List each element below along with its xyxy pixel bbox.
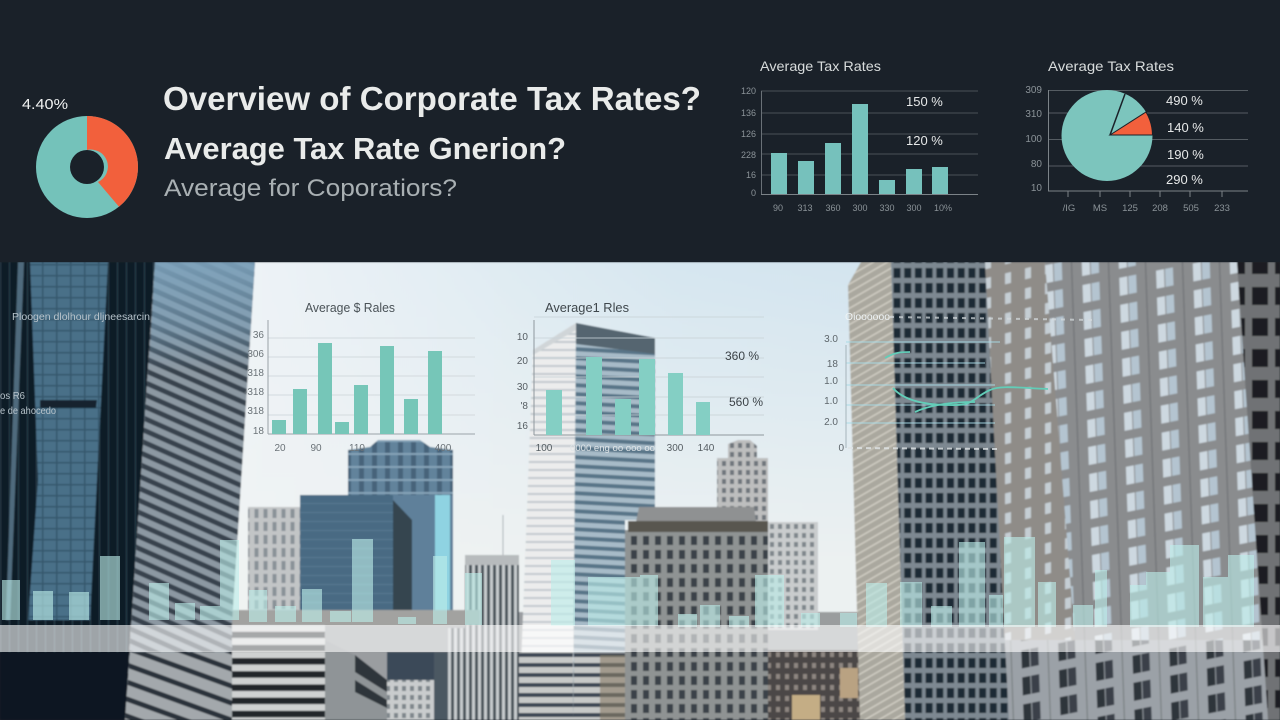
- pie chart: average tax rates: Average Tax Rates: [1048, 58, 1174, 74]
- building: center-left cluster: [230, 440, 519, 632]
- photo overlay line chart right: 1.0: [824, 376, 838, 387]
- photo overlay bar chart center: [517, 300, 764, 454]
- city skyline photo: [0, 262, 1280, 720]
- caption: Average for Coporatiors?: [164, 175, 457, 202]
- photo overlay line chart right: 3.0: [824, 334, 838, 345]
- pie chart: average tax rates: 309: [1025, 85, 1042, 96]
- photo overlay line chart right: 2.0: [824, 417, 838, 428]
- bar chart: average tax rates: 228: [741, 150, 756, 160]
- bar chart: average tax rates: 300: [906, 203, 922, 213]
- photo overlay bar chart center: 560 %: [729, 395, 763, 409]
- bar chart: average tax rates: Average Tax Rates: [760, 58, 881, 74]
- building: dark grid tower: [848, 262, 1009, 720]
- building: slanted gray tower: [125, 262, 255, 720]
- photo overlay bar chart left: [244, 300, 475, 454]
- pie chart: average tax rates: 290 %: [1166, 172, 1203, 187]
- overlay text on dark tower: e de ahocedo: [0, 406, 56, 417]
- donut chart: [22, 96, 138, 218]
- photo overlay line chart right: 18: [827, 359, 838, 370]
- photo overlay bar chart left: 36: [253, 330, 264, 341]
- pie chart: average tax rates: [1025, 58, 1248, 214]
- pie chart: average tax rates: 208: [1152, 203, 1168, 214]
- photo overlay bar chart center: 20: [517, 356, 528, 367]
- pie chart: average tax rates: 490 %: [1166, 93, 1203, 108]
- donut chart: 4.40%: [22, 96, 68, 113]
- bar chart: average tax rates: 300: [852, 203, 868, 213]
- photo overlay bar chart left: 110: [349, 443, 365, 454]
- photo overlay bar chart center: 16: [517, 421, 528, 432]
- pie chart: average tax rates: 233: [1214, 203, 1230, 214]
- bar chart: average tax rates: 360: [825, 203, 841, 213]
- bar chart: average tax rates: [741, 58, 978, 213]
- bar chart: average tax rates: 126: [741, 129, 756, 139]
- pie chart: average tax rates: 190 %: [1167, 147, 1204, 162]
- pie chart: average tax rates: /IG: [1063, 203, 1075, 214]
- photo overlay bar chart left: 20: [274, 443, 286, 454]
- photo overlay bar chart center: 300: [667, 443, 684, 454]
- bar chart: average tax rates: 120: [741, 86, 756, 96]
- pie chart: average tax rates: 100: [1025, 134, 1042, 145]
- photo overlay bar chart left: 318: [247, 368, 264, 379]
- building: stone block: [625, 507, 768, 720]
- building: central tower: [519, 323, 655, 720]
- building: ornate tower: [717, 440, 858, 630]
- pie chart: average tax rates: 505: [1183, 203, 1199, 214]
- overlay text on dark tower: Ploogen dlolhour dljneesarcin: [12, 312, 150, 323]
- subtitle: Average Tax Rate Gnerion?: [164, 131, 566, 166]
- title: Overview of Corporate Tax Rates?: [163, 80, 701, 117]
- building: windowed right block: [985, 262, 1280, 720]
- photo overlay line chart right: [824, 312, 1095, 454]
- bar chart: average tax rates: 313: [797, 203, 813, 213]
- bar chart: average tax rates: 136: [741, 108, 756, 118]
- photo overlay bar chart left: 306: [247, 349, 264, 360]
- pie chart: average tax rates: 80: [1031, 159, 1042, 170]
- photo overlay bar chart center: 100: [536, 443, 553, 454]
- bar chart: average tax rates: 90: [773, 203, 783, 213]
- translucent band: [0, 625, 1280, 652]
- overlay text on dark tower: os R6: [0, 391, 25, 402]
- pie chart: average tax rates: 10: [1031, 183, 1042, 194]
- photo overlay bar chart left: 90: [310, 443, 322, 454]
- bar chart: average tax rates: 150 %: [906, 94, 943, 109]
- photo overlay bar chart left: 318: [247, 406, 264, 417]
- pie chart: average tax rates: 125: [1122, 203, 1138, 214]
- building: dark left tower: [0, 262, 155, 720]
- translucent bar chart overlay: [2, 537, 1254, 627]
- photo overlay line chart right: 0: [838, 443, 844, 454]
- photo overlay bar chart left: 18: [253, 426, 264, 437]
- pie chart: average tax rates: MS: [1093, 203, 1107, 214]
- photo overlay bar chart center: 0000 eng oo ooo oo: [570, 443, 655, 453]
- photo overlay bar chart center: 30: [517, 382, 528, 393]
- bar chart: average tax rates: 10%: [934, 203, 952, 213]
- pie chart: average tax rates: 140 %: [1167, 120, 1204, 135]
- photo overlay bar chart center: 140: [698, 443, 715, 454]
- overlay text on dark tower: [0, 312, 150, 417]
- photo overlay bar chart left: 400: [435, 443, 452, 454]
- bar chart: average tax rates: 330: [879, 203, 895, 213]
- bar chart: average tax rates: 16: [746, 170, 756, 180]
- photo overlay bar chart center: 10: [517, 332, 528, 343]
- photo overlay bar chart center: '8: [521, 401, 528, 412]
- photo overlay bar chart left: Average $ Rales: [305, 300, 395, 315]
- photo overlay bar chart left: -318: [244, 387, 264, 398]
- photo overlay line chart right: 1.0: [824, 396, 838, 407]
- photo overlay bar chart center: Average1 Rles: [545, 300, 629, 315]
- pie chart: average tax rates: 310: [1025, 109, 1042, 120]
- building: lower striped block: [232, 625, 519, 720]
- photo overlay line chart right: Oioooooo: [845, 312, 890, 323]
- header panel: [0, 0, 1280, 262]
- photo overlay bar chart center: 360 %: [725, 349, 759, 363]
- building: lower brown block: [768, 650, 860, 720]
- bar chart: average tax rates: 120 %: [906, 133, 943, 148]
- bar chart: average tax rates: 0: [751, 188, 756, 198]
